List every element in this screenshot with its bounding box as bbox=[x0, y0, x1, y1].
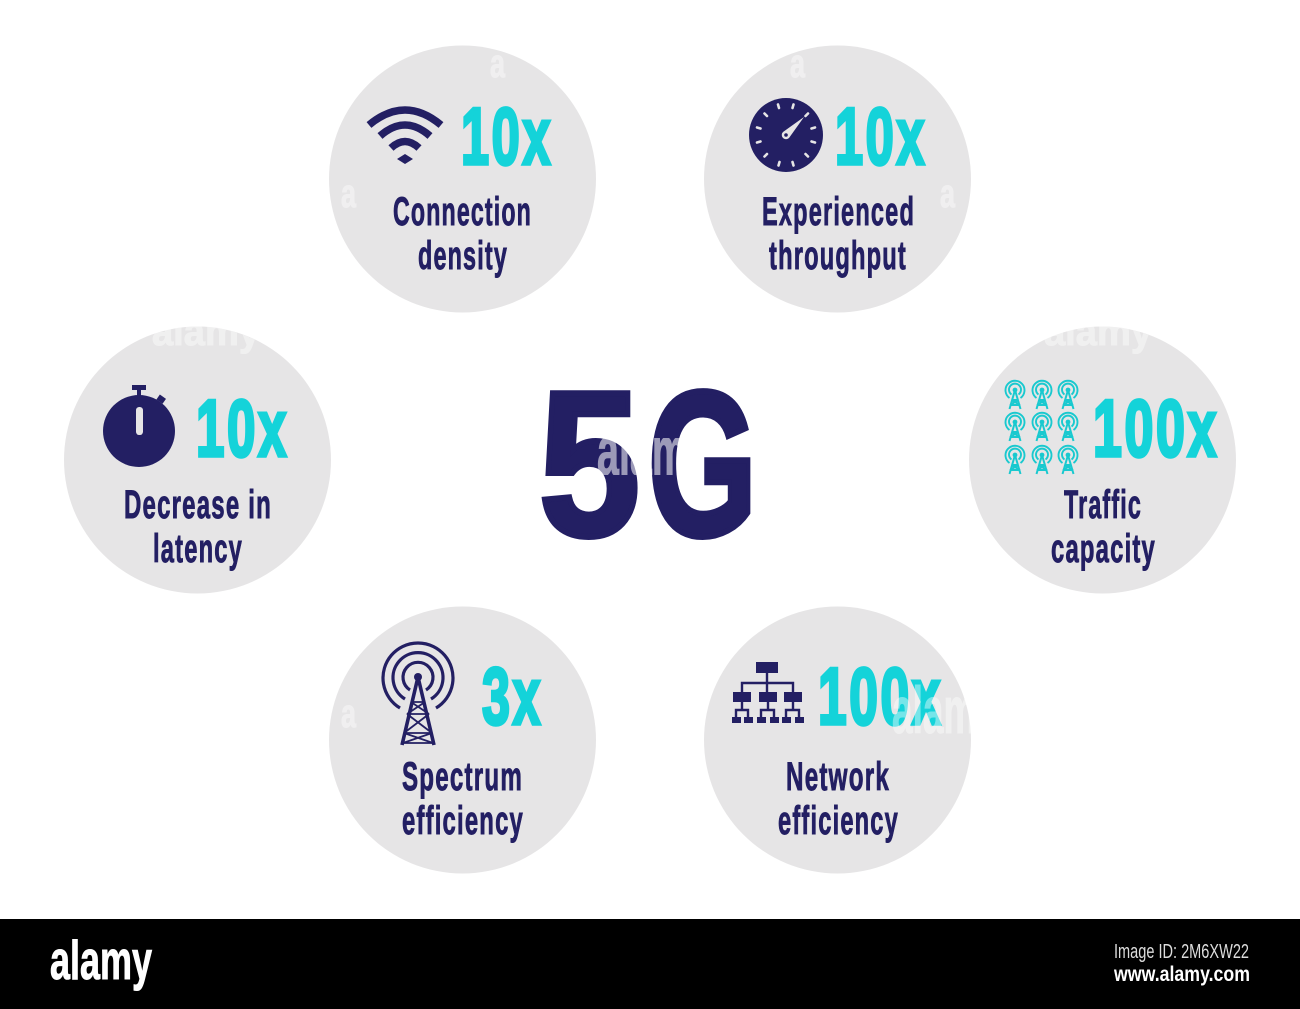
title: 5G: alam bbox=[597, 412, 687, 490]
panel: experienced throughput: a bbox=[940, 172, 956, 216]
panel: decrease in latency: alamy bbox=[152, 310, 261, 354]
panel: spectrum efficiency bbox=[329, 606, 596, 874]
title: 5G: 5 bbox=[539, 349, 640, 579]
label: traffic capacity: capacity bbox=[1051, 527, 1156, 571]
label: experienced throughput bbox=[762, 190, 915, 278]
footer bar bbox=[0, 919, 1300, 1009]
label: decrease in latency bbox=[124, 483, 272, 571]
label: network efficiency bbox=[778, 755, 899, 843]
label: network efficiency: Network bbox=[786, 755, 890, 799]
panel: traffic capacity: alamy bbox=[1044, 310, 1153, 354]
footer url: www.alamy.com bbox=[1113, 963, 1250, 986]
label: network efficiency: efficiency bbox=[778, 799, 899, 843]
icon: speedometer bbox=[749, 98, 823, 172]
icon: network hierarchy bbox=[732, 662, 804, 723]
icon: wifi bbox=[369, 110, 441, 164]
label: traffic capacity bbox=[1051, 483, 1156, 571]
stat: 3x: 3x bbox=[482, 652, 543, 742]
watermark: alamy: alamy bbox=[892, 673, 997, 747]
stat: 100x: 100x bbox=[818, 652, 943, 742]
icon: stopwatch bbox=[103, 385, 175, 467]
stat: 10x: 10x bbox=[835, 92, 927, 182]
panel: network efficiency bbox=[704, 606, 997, 874]
panel: spectrum efficiency: a bbox=[341, 692, 357, 736]
label: experienced throughput: Experienced bbox=[762, 190, 915, 234]
label: spectrum efficiency: efficiency bbox=[402, 799, 524, 843]
panel: connection density bbox=[329, 42, 596, 312]
label: decrease in latency: latency bbox=[153, 527, 243, 571]
panel: decrease in latency bbox=[64, 310, 331, 594]
label: experienced throughput: throughput bbox=[769, 234, 907, 278]
panel: experienced throughput: a bbox=[790, 42, 806, 86]
panel: connection density: a bbox=[490, 42, 506, 86]
stat: 10x: 10x bbox=[196, 384, 289, 474]
icon: antenna tower bbox=[383, 643, 453, 745]
label: connection density bbox=[393, 190, 532, 278]
icon: grid of towers bbox=[1006, 381, 1078, 474]
label: decrease in latency: Decrease in bbox=[124, 483, 272, 527]
title: 5G: G bbox=[648, 349, 757, 579]
label: connection density: Connection bbox=[393, 190, 532, 234]
label: spectrum efficiency bbox=[402, 755, 524, 843]
label: traffic capacity: Traffic bbox=[1064, 483, 1142, 527]
label: spectrum efficiency: Spectrum bbox=[402, 755, 523, 799]
footer logo: alamy bbox=[50, 929, 152, 991]
footer image id: Image ID: 2M6XW22 bbox=[1114, 941, 1249, 963]
label: connection density: density bbox=[418, 234, 508, 278]
title: 5G bbox=[542, 388, 750, 540]
panel: traffic capacity bbox=[969, 310, 1236, 594]
stat: 10x: 10x bbox=[461, 92, 553, 182]
panel: connection density: a bbox=[341, 172, 357, 216]
stat: 100x: 100x bbox=[1093, 384, 1219, 474]
panel: experienced throughput bbox=[704, 42, 971, 312]
